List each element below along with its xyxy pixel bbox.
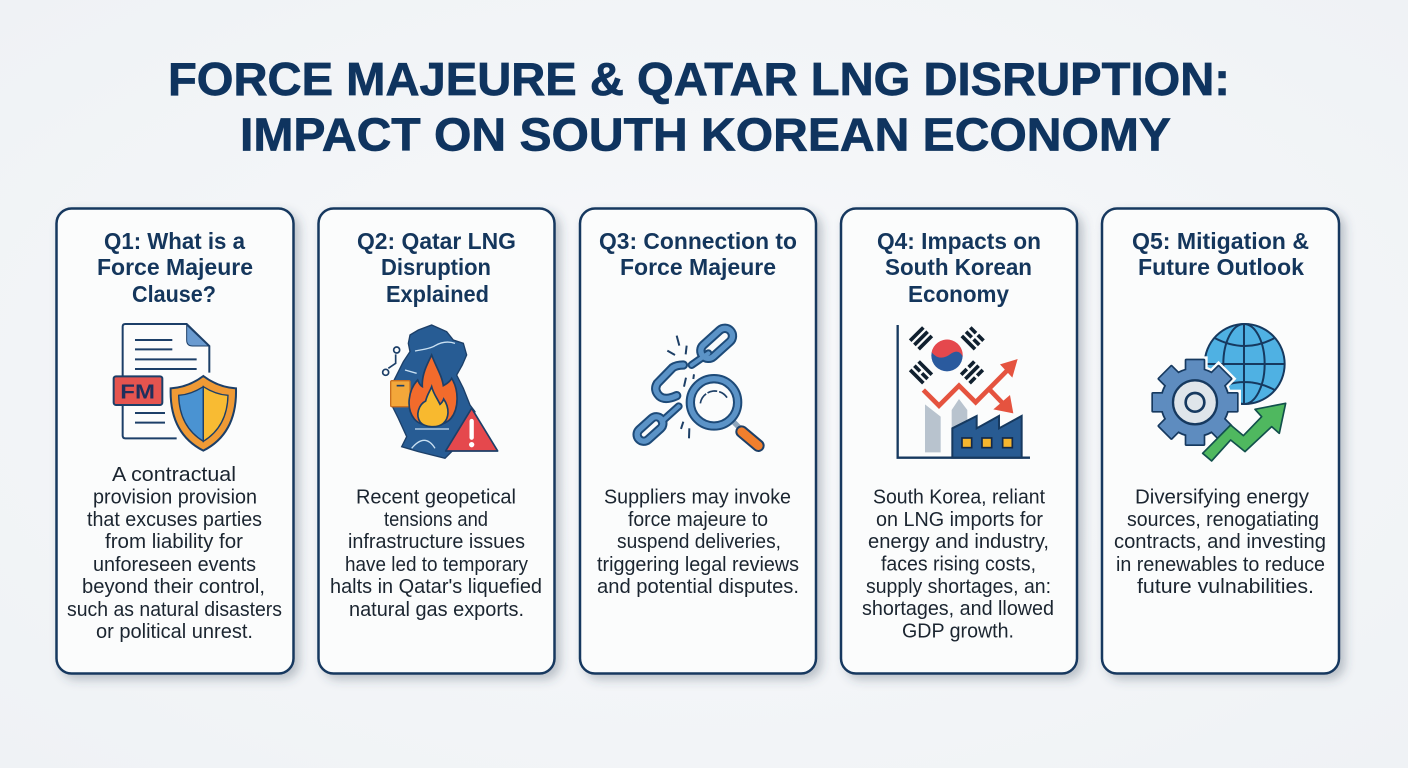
text: Q4 body: faces rising costs, [881, 552, 1036, 576]
text: Q5 body: future vulnabilities. [1137, 575, 1314, 598]
heading: Q2: Disruption [381, 254, 491, 280]
text: Q4 body: South Korea, reliant [873, 486, 1045, 508]
heading: Q2 [357, 228, 516, 307]
text: Q3 body: Suppliers may invoke [604, 486, 791, 508]
heading: Q4: Economy [908, 281, 1009, 307]
heading: Q3 [599, 228, 797, 280]
text: Q1 body: that excuses parties [87, 508, 262, 531]
icon: document with FM tag and shield [114, 324, 236, 451]
text: Q1 body: provision provision [93, 486, 257, 508]
text: Q5 body: Diversifying energy [1135, 486, 1310, 508]
text: Q4 body [862, 486, 1054, 642]
text: Q2 body: tensions and [384, 508, 488, 531]
text: Q3 body: triggering legal reviews [597, 553, 799, 576]
heading: Q2: Explained [386, 281, 489, 307]
text: Q1 body: beyond their control, [82, 575, 265, 598]
text: Q4 body: energy and industry, [868, 530, 1049, 553]
heading: Q1: Q1: What is a [104, 228, 245, 254]
text: Q1 body: A contractual [112, 463, 236, 486]
text: Q3 body: force majeure to [628, 508, 768, 531]
heading: Q1 [97, 228, 253, 307]
text: Q2 body: halts in Qatar's liquefied [330, 575, 542, 598]
text: Q4 body: on LNG imports for [876, 508, 1043, 531]
icon: Korean flag chart and factory [898, 325, 1030, 458]
text: Q4 body: GDP growth. [902, 620, 1014, 642]
text: Q5 body: sources, renogatiating [1127, 508, 1319, 531]
text: Q3 body: and potential disputes. [597, 575, 799, 598]
text: Q5 body: contracts, and investing [1114, 530, 1326, 553]
heading: Q5: Q5: Mitigation & [1132, 228, 1309, 254]
heading: Q1: Clause? [132, 281, 216, 307]
heading: Q4 [877, 228, 1041, 307]
text: Q2 body: have led to temporary [345, 553, 529, 576]
panel: Q5 mitigation and future outlook [1102, 208, 1339, 674]
heading: Q4: Q4: Impacts on [877, 228, 1041, 254]
text: Q4 body: supply shortages, an: [866, 575, 1051, 598]
heading: Q1: Force Majeure [97, 254, 253, 280]
text: Q3 body [597, 486, 799, 598]
text: Q2 body [330, 486, 542, 621]
icon: Qatar map with flame and warning [383, 325, 498, 458]
heading: Q2: Q2: Qatar LNG [357, 228, 516, 254]
title [168, 53, 1230, 160]
text: Q1 body: from liability for [105, 530, 243, 553]
text: Q1 body: or political unrest. [96, 620, 253, 643]
heading: Q3: Q3: Connection to [599, 228, 797, 254]
title: FORCE MAJEURE & QATAR LNG DISRUPTION: [168, 53, 1230, 105]
text: Q5 body [1114, 486, 1326, 598]
heading: Q3: Force Majeure [620, 254, 776, 280]
panel: Q1 force majeure clause [56, 208, 294, 674]
text: Q3 body: suspend deliveries, [617, 530, 781, 553]
heading: Q4: South Korean [885, 254, 1032, 280]
icon: document with FM tag and shield: FM [120, 382, 155, 404]
panel: Q4 impacts on South Korean economy [841, 208, 1077, 674]
text: Q1 body: unforeseen events [93, 553, 256, 576]
text: Q2 body: natural gas exports. [349, 598, 524, 621]
heading: Q5 [1132, 228, 1309, 280]
text: Q1 body: such as natural disasters [67, 598, 282, 621]
text: Q2 body: Recent geopetical [356, 486, 516, 508]
heading: Q5: Future Outlook [1138, 254, 1304, 280]
text: Q4 body: shortages, and llowed [862, 597, 1054, 620]
icon: broken chain and magnifying glass [634, 325, 758, 446]
text: Q5 body: in renewables to reduce [1116, 553, 1325, 576]
panel: Q3 connection to force majeure [580, 208, 816, 674]
icon: gear, globe and growth arrow [1153, 324, 1286, 461]
text: Q1 body [67, 463, 282, 643]
title: IMPACT ON SOUTH KOREAN ECONOMY [240, 108, 1171, 160]
panel: Q2 Qatar LNG disruption [318, 208, 554, 674]
text: Q2 body: infrastructure issues [348, 530, 525, 553]
